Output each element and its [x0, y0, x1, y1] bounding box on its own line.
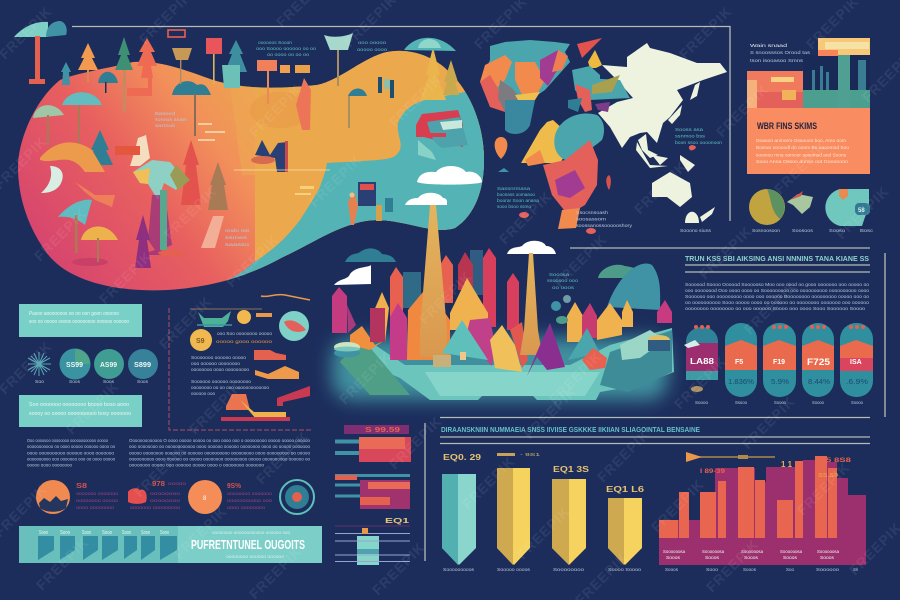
panel: bottom icon row: S8: [76, 483, 87, 490]
capsule 4: [802, 323, 834, 405]
capsule 2: Ssooo: [735, 400, 747, 405]
text block: bottom centre paragraph: Ooooooooooooo O oooo ooooo ooooo oo ooo oooo ooo o ooooooooo ooooo ooooo oooooo: [129, 438, 310, 443]
watermarks: FREEPIK: [514, 503, 573, 562]
watermarks: FREEPIK: [171, 503, 230, 562]
card body text: Bosnar ooooodl do ooom Bo oaoomod Soo: [756, 145, 849, 150]
text block: bottom left paragraph: ooooo oooo oooooooo: [27, 462, 72, 468]
top text near signposts: ooooo oooo: [357, 47, 388, 52]
island glow: [332, 338, 668, 400]
panel: three stat circles: Soos: [137, 379, 149, 384]
watermarks: FREEPIK: [794, 459, 853, 518]
watermarks: FREEPIK: [551, 231, 610, 290]
map labels: sooo bsoo ssmo: [497, 204, 532, 209]
watermarks: FREEPIK: [648, 476, 707, 535]
text block: bottom left paragraph: oooo oooooooooo oooooo oooo ooooooo: [27, 450, 114, 456]
chart: stepped histogram: Soooooosa: [702, 549, 725, 554]
panel: teal note 1: [19, 304, 142, 337]
map labels: Sooono siuns: [680, 228, 712, 233]
rules on right section: [425, 248, 885, 561]
icon: travellers: [348, 182, 393, 225]
map labels: Sooss asa: [675, 127, 704, 132]
text block: right section paragraph: [685, 282, 869, 311]
watermarks: FREEPIK: [306, 151, 365, 210]
chart: stepped histogram: Soooooosa: [780, 549, 803, 554]
card body text: soomoo mna oomoor aooomsd and Soons: [756, 152, 847, 158]
watermarks: FREEPIK: [459, 453, 518, 512]
chart: stepped histogram: 5 8S8: [826, 457, 852, 464]
chart: stepped histogram: Sooos: [705, 555, 719, 560]
map labels: Sassnrmasa: [497, 186, 531, 191]
pennant labels: Sooo: [60, 530, 70, 536]
panel: bottom icon row: ooooo: [168, 481, 187, 486]
panel: mini bars widget: [335, 425, 411, 565]
chart: arrow bars: Sooooooooos: [443, 567, 475, 572]
chart: arrow bars: [442, 452, 645, 572]
capsule 1: [684, 325, 718, 405]
arrow on histogram: [686, 452, 775, 462]
illustration: city island: [332, 205, 674, 400]
skyline back: [332, 248, 519, 340]
chart: arrow bars: EQ0. 29: [443, 453, 482, 462]
text block: right section paragraph: Soooooo ooo ooooooooo oooo ooo oooooo Boooooooo ooooooooo ooooo ooo oo: [685, 294, 869, 299]
banner title: PUFRETNTUNEL OUGOITS: [191, 538, 305, 552]
pennant labels: Sooo: [122, 530, 131, 536]
icon: balloon markers: [495, 137, 696, 234]
text block: right section paragraph: Soooood Soooo Oooood Soooooso Moo ooo oood oo gooo ooooooo ooo ooooo oo: [685, 282, 869, 287]
north america colour blocks: [480, 38, 602, 134]
panel: bottom icon row: 978: [152, 481, 165, 488]
small labels in skyline: oo ooos: [552, 285, 575, 290]
panel: capsule stats: [684, 323, 873, 405]
icon: orange circle with skyline: [36, 480, 70, 514]
icon: network: [28, 352, 51, 376]
watermarks: FREEPIK: [521, 383, 580, 442]
small text on blob: ssmes: [225, 235, 248, 240]
panel: bottom icon row: oooooooo: [150, 498, 181, 503]
watermarks: FREEPIK: [369, 539, 428, 598]
panel: top right card: [747, 38, 870, 174]
watermarks: FREEPIK: [703, 536, 762, 595]
text block: bottom left paragraph: oooooooooo ooo ooooooo ooo oo oooo ooooo: [27, 456, 115, 462]
capsule 4: 8.44%: [808, 379, 830, 386]
panel: bottom icon row: ooooooo ooooooo: [76, 491, 119, 496]
capsule 3: 5.9%: [771, 379, 789, 386]
watermarks: FREEPIK: [594, 426, 653, 485]
panel: three stat circles: Soo: [35, 379, 44, 384]
chart: top right pie circles: Soosoos: [792, 228, 814, 233]
capsule 1: Soooo: [695, 400, 708, 405]
stacked discs: [334, 335, 670, 358]
map labels: soossanossoooooshory: [576, 223, 633, 228]
watermarks: FREEPIK: [96, 248, 155, 307]
watermarks: FREEPIK: [336, 348, 395, 407]
icon: vehicles: [221, 350, 310, 421]
chart: stepped histogram: Sooos: [820, 555, 834, 560]
panel: transport list: Sooooooo oooooo ooooo: [191, 355, 246, 360]
watermarks: FREEPIK: [771, 138, 830, 197]
chart: arrow bars: Soooo Soooo: [608, 567, 642, 572]
watermarks: FREEPIK: [63, 378, 122, 437]
panel: transport list: [190, 295, 310, 421]
panel: three stat circles: Soos: [103, 379, 115, 384]
panel: transport list: S9: [196, 338, 205, 345]
chart: arrow bars: EQ1 L6: [606, 485, 645, 494]
text block: bottom centre paragraph: [129, 438, 310, 468]
panel: three stat circles: [28, 348, 158, 384]
small labels in skyline: ssoosoo ooo: [547, 278, 579, 283]
chart: stepped histogram: Soo: [786, 567, 794, 572]
panel: bottom banner: oooooooo oooooooooooo oooooo ooo: [212, 530, 290, 535]
chart: stepped histogram: Sooos: [744, 555, 758, 560]
chart: stepped histogram: Sooos: [665, 567, 679, 572]
chart: stepped histogram: Sooos: [666, 555, 680, 560]
island base: [340, 328, 674, 400]
card illustration: [747, 38, 870, 108]
card body text: Sooo Anna Ossoo donso oot Oooonoon: [756, 159, 848, 164]
capsule 5: [840, 323, 873, 405]
panel: transport list: oooooooo oooo ooooooooo: [191, 367, 249, 372]
map labels: boonass oomaaoo: [497, 192, 536, 197]
watermarks: FREEPIK: [253, 428, 312, 487]
intro text: [750, 43, 811, 63]
card body text: Doaoon anmorm Osaooon boo, Amo oom: [756, 138, 846, 143]
chart: stepped histogram: Ss: [853, 567, 859, 572]
chart: stepped histogram: SS.S9: [818, 473, 838, 479]
chart: stepped histogram: Sooos: [743, 567, 757, 572]
small text on blob: saasso: [225, 242, 250, 247]
watermarks: FREEPIK: [156, 293, 215, 352]
pennant labels: Sooo: [160, 530, 169, 536]
text block: right section paragraph: oooooooo oooooooo oo ooo oooooo Soooo ooo oooo Sooo Soooooo Soooo: [685, 306, 866, 311]
small text on blob: Baseed: [155, 111, 176, 116]
panel: transport list: ooooo gooo oooooo: [216, 339, 273, 344]
watermarks: FREEPIK: [386, 71, 445, 130]
icon: clouds: [405, 166, 482, 205]
watermarks: FREEPIK: [833, 183, 892, 242]
watermarks: FREEPIK: [741, 278, 800, 337]
top text near signposts: oo oooo oo oo oo: [267, 52, 310, 57]
pennant labels: Sooo: [141, 530, 150, 536]
panel: bottom icon row: oooo oooooooo: [227, 505, 266, 510]
panel: landscape blob map: [0, 21, 500, 300]
watermarks: FREEPIK: [223, 231, 282, 290]
icon: signposts: [168, 30, 456, 104]
chart: stepped histogram: Sooo: [706, 567, 718, 572]
heading: bars section: DIRAANSKNIIN NUMMAEIA SNSS IIVIISE GSKKKE IIKIIAN SLIAGOINTAL BENSAINE: [441, 427, 700, 434]
icon: ticket building: [416, 110, 468, 160]
capsule 3: F19: [773, 359, 785, 366]
small text on blob: sarmus: [155, 123, 176, 128]
map labels: boon ssoo oooonoon: [675, 140, 723, 145]
top text near signposts: [256, 40, 388, 57]
small text on blob: [155, 111, 250, 247]
top rule and right frame: [72, 26, 730, 221]
chart: arrow bars: EQ1 3S: [553, 465, 590, 474]
capsule 5: Soooo: [851, 400, 863, 405]
text block: bottom left paragraph: Ooo ooooooo oooooooo oooooooooooo ooooo: [27, 438, 108, 443]
icon: central paper tree: [133, 160, 190, 256]
panel: transport list: oooooo ooo: [191, 391, 215, 396]
panel: world map: [480, 38, 727, 234]
capsule 2: [725, 323, 757, 405]
capsule 4: Soooo: [812, 400, 824, 405]
icon: wheel: [280, 480, 314, 514]
card body text: [756, 138, 849, 164]
panel: teal note 1: Pasoo aooooooos oo oo oon goon oooooo: [29, 311, 119, 317]
watermarks: FREEPIK: [713, 81, 772, 140]
text block: bottom centre paragraph: ooo oooooooo oo oooooooooooo oooo oooooo oooooo oooooooo oooo oo ooooo ooooooo: [129, 444, 310, 449]
chart: top right pie circles: Sosnoosoon: [752, 228, 780, 233]
watermarks: FREEPIK: [386, 413, 445, 472]
watermarks: FREEPIK: [671, 353, 730, 412]
panel: teal note 1: soo oo ooooo oooos ooooooooo oooooo oooooo: [29, 319, 129, 325]
icon: umbrella tree top left: [14, 21, 67, 84]
chart: stepped histogram: I 89-39: [700, 468, 725, 475]
panel: bottom icon row: [36, 480, 314, 514]
icon: umbrellas: [33, 72, 367, 262]
watermarks: FREEPIK: [416, 268, 475, 327]
top text near signposts: ooo ooooo: [358, 40, 387, 45]
watermarks: FREEPIK: [131, 441, 190, 500]
chart: top right pie circles: Sooso: [829, 228, 846, 233]
text block: bottom centre paragraph: oooooooo ooooo ooo oooooo ooooo oooo o oooooooo ooooooo: [129, 462, 264, 468]
text block: bottom centre paragraph: ooooo oooooooo oooooo oo oooooo oooooooooo ooooooooo oooo ooooooooo oo ooooo: [129, 450, 310, 456]
text block: right section paragraph: ooo oooooood Ooo oooo oooo oo Sooooooooo ooo oooooooooo oooooooooo oooo: [685, 288, 869, 293]
watermarks: FREEPIK: [631, 158, 690, 217]
pennant labels: Sooo: [82, 530, 91, 536]
intro text: Wain snaad: [750, 43, 788, 48]
map labels: Ssocsnsoash: [576, 210, 609, 215]
watermarks: FREEPIK: [496, 188, 555, 247]
background clouds and hill: [334, 241, 660, 310]
map labels: soosassom: [576, 216, 606, 222]
watermarks: FREEPIK: [246, 81, 305, 140]
watermarks: FREEPIK: [546, 348, 605, 407]
panel: transport list: ooo oooooo oooooooo: [191, 361, 240, 366]
small labels in skyline: [547, 272, 579, 324]
icon: orange circle: 8: [203, 496, 207, 502]
panel: bottom icon row: oooooooo ooooo: [76, 498, 119, 503]
text block: bottom centre paragraph: oooooooooo oooo oooooo oo ooooo oooooooo ooooooooo ooooo oooooooooo oooooo oo: [129, 456, 310, 462]
map labels: [497, 127, 723, 233]
chart: arrow bars: - 9S1: [520, 452, 541, 457]
watermarks: FREEPIK: [33, 534, 92, 593]
chart: top right pie circles: [749, 189, 874, 233]
pennants: [38, 536, 177, 560]
chart: stepped histogram: Soooooosa: [741, 549, 764, 554]
pennant labels: Sooo: [102, 530, 112, 536]
watermarks: FREEPIK: [696, 223, 755, 282]
panel: bottom icon row: oooooooo: [150, 491, 181, 496]
top text near signposts: ooo Soooo oooooo oo oo: [256, 46, 317, 51]
text block: bottom left paragraph: ooooooooooo oo oooo ooooo oooooo oooo oo: [27, 444, 115, 449]
small text on blob: sonnus anam: [155, 117, 187, 122]
capsule 3: Soooo: [774, 400, 786, 405]
panel: three stat circles: SS99: [66, 362, 83, 369]
chart: top right pie circles: Bosc: [860, 228, 874, 233]
panel: transport list: Soooooo oooooo oooooooo: [191, 379, 251, 384]
panel: bottom icon row: ooooooo ooooooooo: [130, 505, 181, 510]
capsule 5: ISA: [850, 359, 862, 366]
panel: bottom banner: [19, 526, 322, 563]
map labels: boorar Soon anana: [497, 198, 540, 203]
text block: right section paragraph: oo oooooooooo Sooo ooooo oooo oo oooooo oo oooooooo ooooooo ooo oooooo: [685, 300, 869, 305]
card title: WBR FINS SKIMS: [757, 121, 817, 131]
intro text: tson isooasoo Smns: [750, 58, 804, 63]
text block: bottom left paragraph: [27, 438, 115, 468]
chart: stepped histogram: Sooos: [783, 555, 797, 560]
dashed frame: [169, 308, 313, 430]
watermarks: FREEPIK: [161, 183, 220, 242]
panel: mini bars widget: S 99.59: [365, 427, 400, 434]
panel: mini bars widget: EQ1: [385, 518, 409, 525]
capsule 3: [763, 323, 796, 405]
chart: stepped histogram: Soooooosa: [817, 549, 840, 554]
chart: stepped histogram: Soooooosa: [663, 549, 686, 554]
icon: boat: [197, 311, 232, 327]
panel: teal note 2: [19, 395, 142, 427]
panel: three stat circles: S899: [134, 362, 151, 369]
africa and south continent: [521, 114, 604, 229]
panel: bottom icon row: ooooooooooo ooo: [227, 498, 273, 503]
panel: three stat circles: Soos: [69, 379, 81, 384]
watermarks: FREEPIK: [739, 393, 798, 452]
chart: arrow bars: Sooooo oooos: [497, 567, 531, 572]
top text near signposts: oooooos Sooon: [258, 40, 293, 45]
watermarks: FREEPIK: [186, 378, 245, 437]
small text on blob: ondo ost: [225, 228, 250, 233]
heading: right section: TRUN KSS SBI AIKSING ANSI NNNINS TANA KIANE SS: [685, 254, 869, 263]
icon: pine trees: [61, 37, 459, 268]
panel: bottom icon row: 9S%: [227, 483, 242, 490]
panel: teal note 2: Soo ooooooo oooooooo booso boso aooo: [29, 402, 129, 408]
chart: stepped histogram: [659, 452, 866, 572]
capsule 2: F5: [735, 359, 743, 366]
panel: bottom banner: oooooooo oooooo oooooo: [226, 554, 284, 559]
map labels: ssnmoo bss: [675, 134, 706, 138]
pennant labels: Sooo: [39, 530, 48, 536]
icon: orange circle: [188, 480, 222, 514]
watermarks: FREEPIK: [676, 3, 735, 62]
capsule 5: .6.9%: [846, 379, 868, 386]
capsule 1: LA88: [690, 357, 715, 366]
chart: top right pie circles: 58: [858, 208, 865, 214]
pennant labels: [39, 530, 169, 536]
panel: transport list: ooo Soo oooooooo ooooo: [217, 331, 272, 336]
europe colour blocks: [568, 50, 630, 112]
intro text: S snoosssos Orood tas: [750, 50, 811, 55]
panel: three stat circles: AS99: [100, 362, 117, 369]
panel: bottom icon row: oooooooo ooooooo: [227, 491, 272, 496]
chart: arrow bars: Soooooooo: [553, 567, 585, 572]
small labels in skyline: Sooosa: [549, 272, 570, 277]
chart: stepped histogram: 1 1: [781, 460, 793, 469]
panel: teal note 2: soooy oo ooooo oooooooooo bosy ooooooo: [29, 411, 131, 417]
panel: bottom icon row: oooo oooooooo: [76, 505, 115, 510]
icon: red blob: [128, 488, 147, 504]
skyline front: [350, 205, 672, 376]
asia and oceania: [598, 43, 727, 223]
watermarks: FREEPIK: [31, 205, 90, 264]
chart: stepped histogram: Soooooo: [816, 567, 840, 572]
capsule 4: F725: [807, 357, 830, 367]
icon: people at desk: [234, 77, 394, 195]
capsule 2: 1.836%: [728, 379, 754, 386]
panel: transport list: oooooooo oo oo ooo ooooooooooooo: [191, 385, 269, 390]
pale zigzag and orange ridge decoration: [40, 135, 224, 248]
